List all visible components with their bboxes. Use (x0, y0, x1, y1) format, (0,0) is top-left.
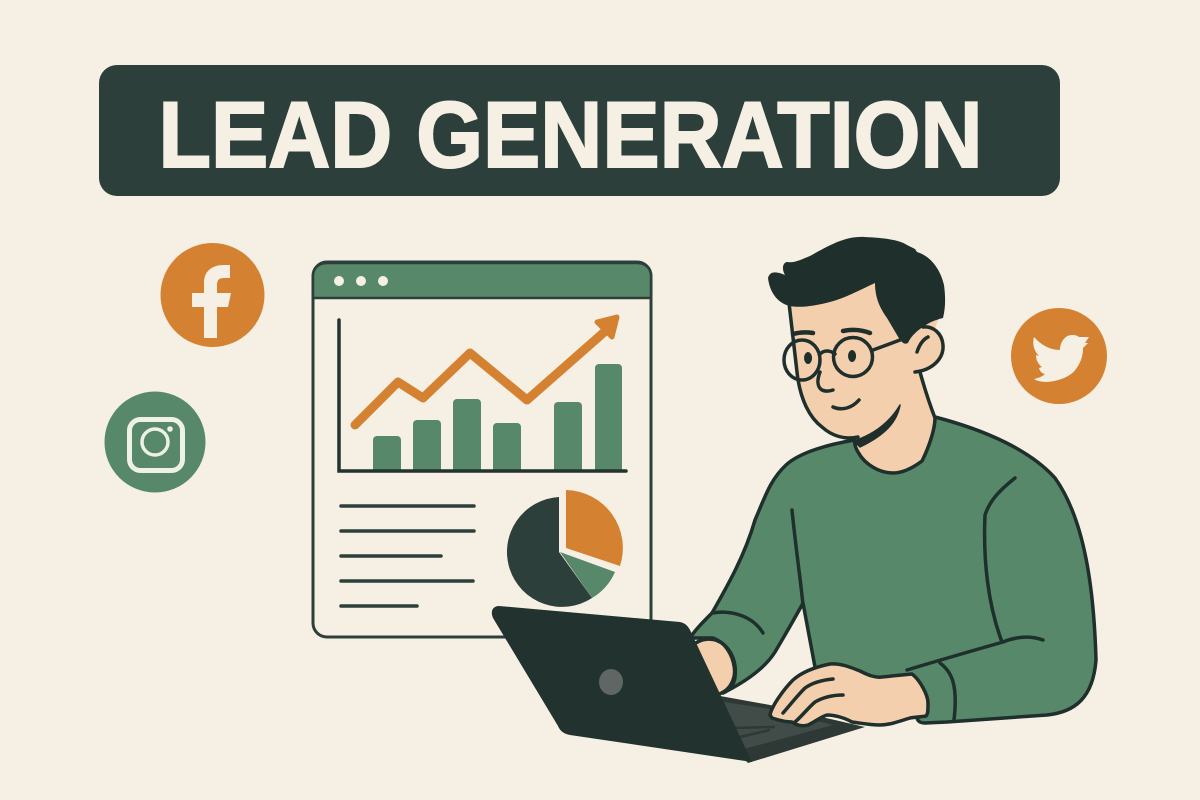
ear (905, 327, 943, 372)
sweater (690, 417, 1096, 723)
icon: instagram (104, 392, 206, 492)
icon: facebook (160, 243, 264, 347)
face outline (789, 303, 935, 473)
eyes (804, 350, 856, 364)
nose and smile (818, 372, 859, 409)
eyebrows (793, 330, 870, 334)
person (690, 237, 1096, 723)
bar chart (339, 320, 626, 471)
trend arrow (355, 317, 617, 425)
text lines (341, 506, 474, 606)
glasses (784, 338, 900, 380)
laptop (492, 606, 865, 763)
window header (313, 263, 651, 298)
sweater seams (712, 478, 1043, 720)
title: LEAD GENERATION (158, 82, 982, 187)
panel: dashboard window (313, 262, 651, 637)
pie chart (507, 490, 623, 607)
icon: twitter (1011, 308, 1107, 404)
right hand (770, 664, 928, 726)
left hand (692, 639, 735, 695)
neck and face (789, 283, 945, 473)
hair (768, 237, 945, 344)
jaw shadow (854, 405, 900, 447)
